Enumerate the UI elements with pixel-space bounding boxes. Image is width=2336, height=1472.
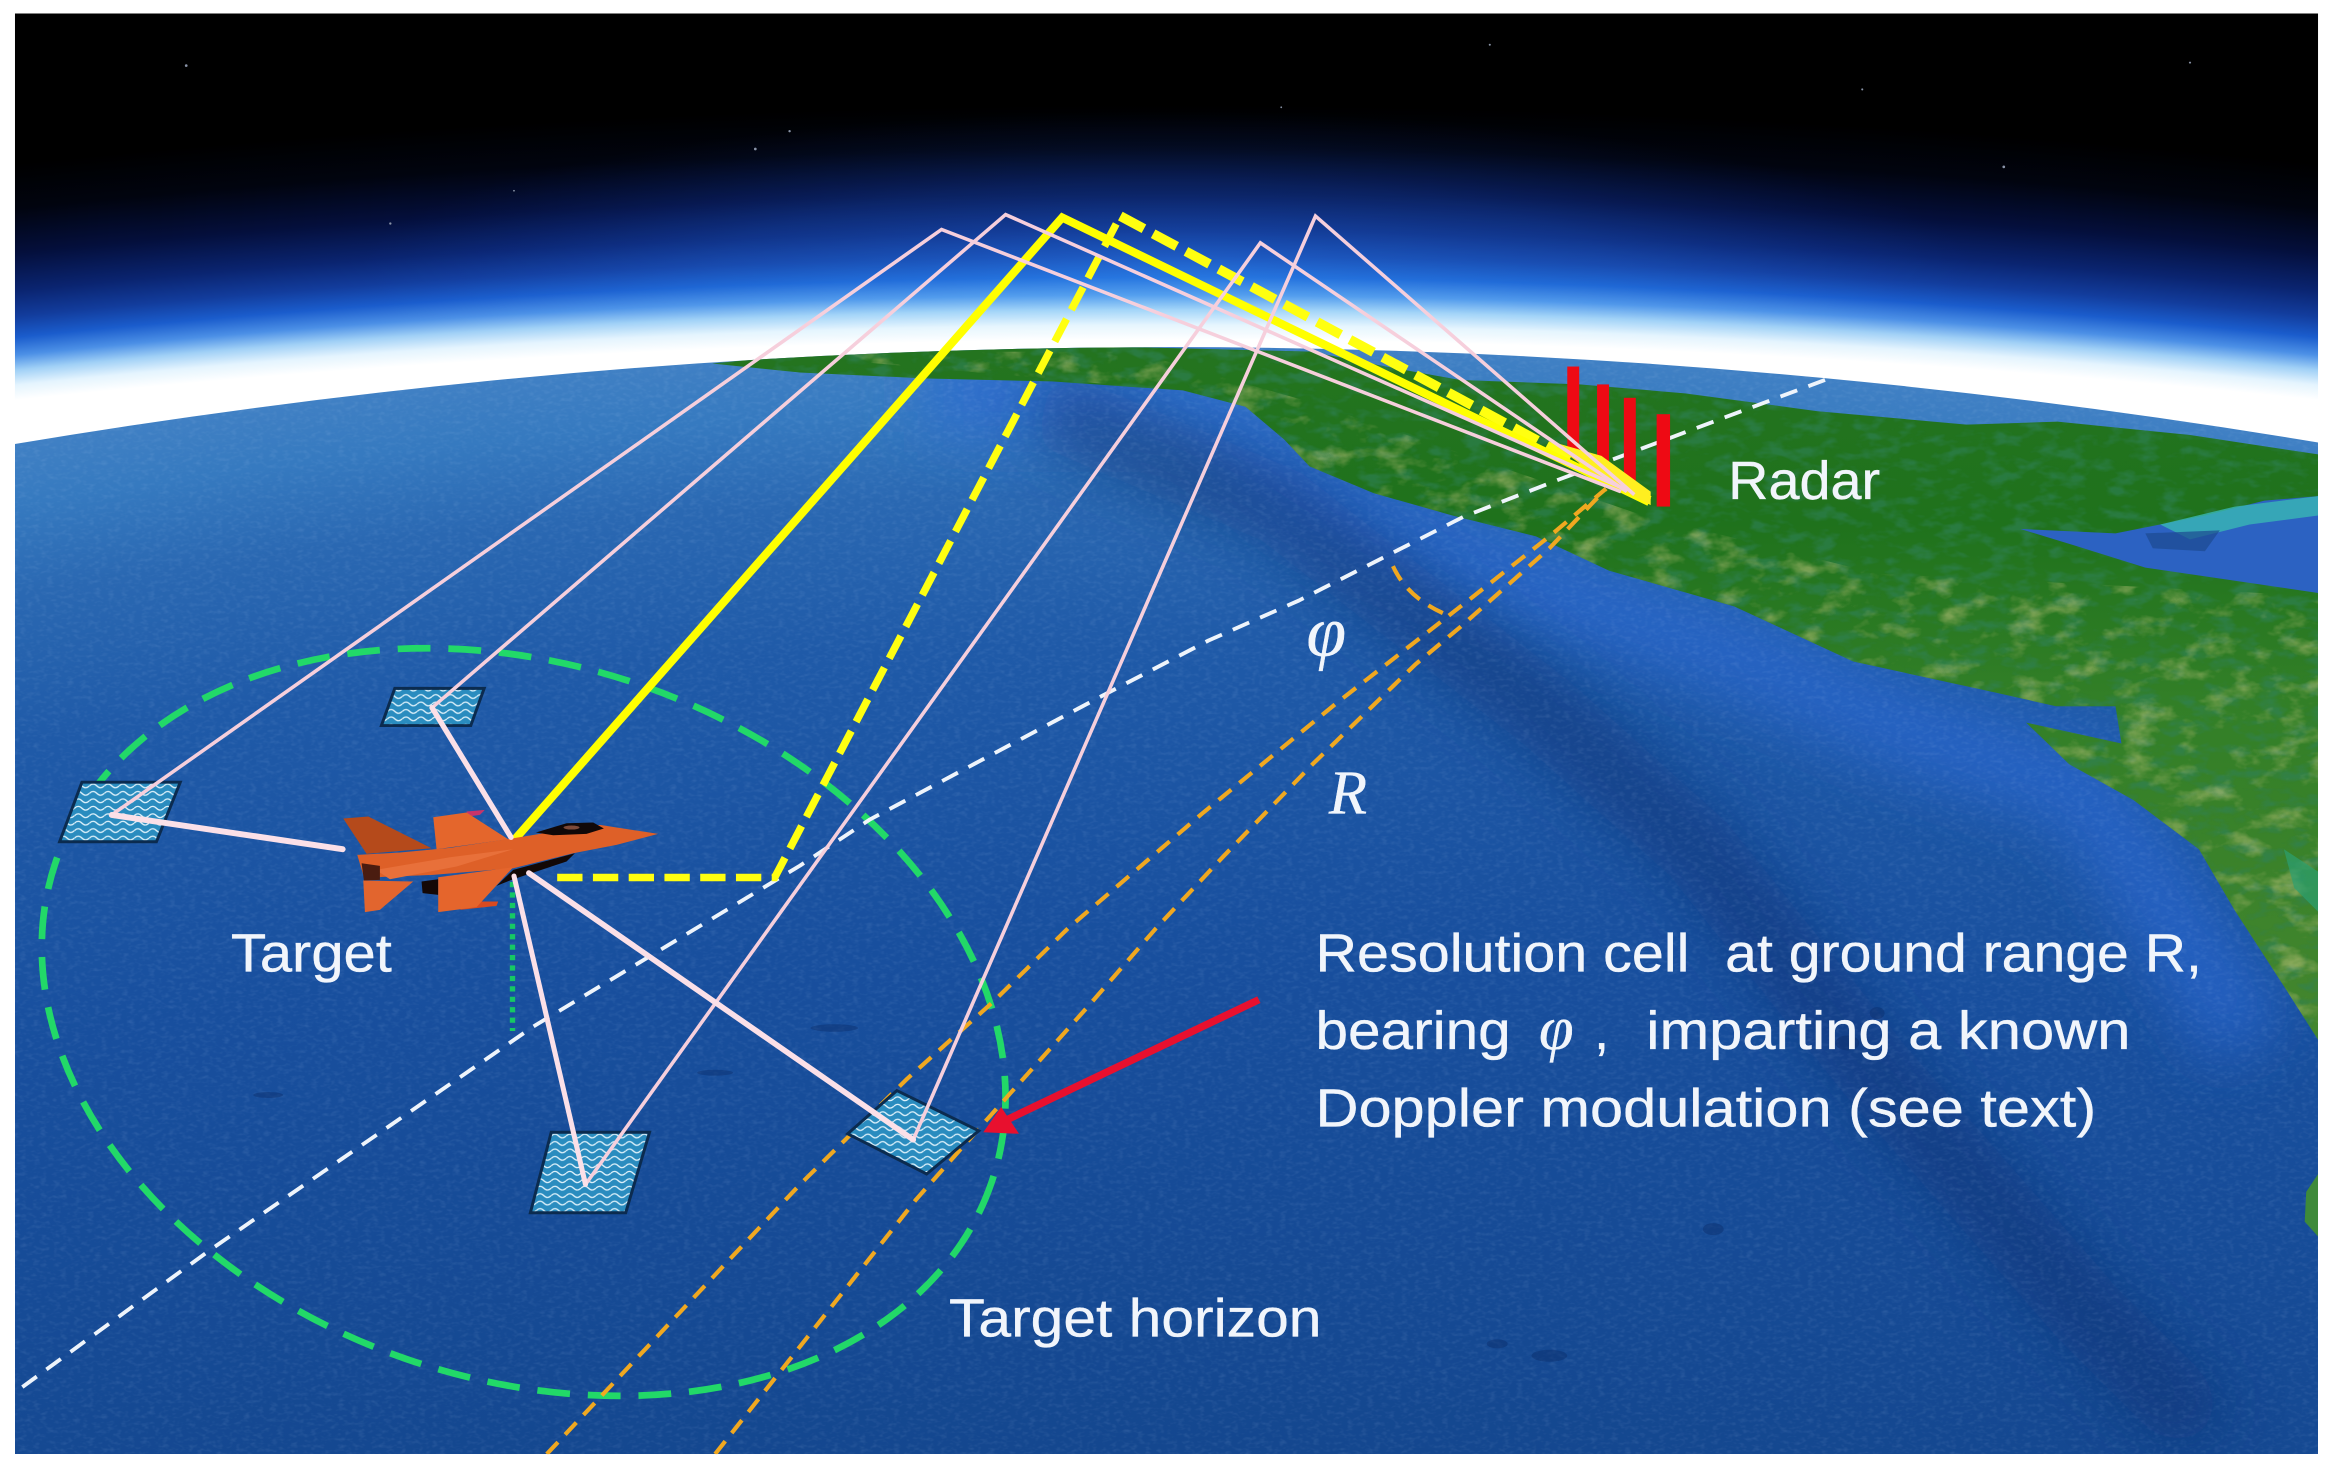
pink lines: clutter paths via ionosphere to radar bbox=[112, 215, 1634, 1184]
red arrow: points to resolution cell bbox=[983, 1000, 1259, 1134]
resolution cell: top bbox=[381, 688, 484, 726]
callout text: resolution cell description: imparting a known bbox=[1646, 1001, 2130, 1061]
resolution cell: far left bbox=[60, 782, 180, 842]
callout text: resolution cell description: Resolution cell bbox=[1315, 923, 1689, 983]
red bars: radar array bbox=[1567, 367, 1670, 507]
yellow solid line: direct path to target bbox=[514, 218, 1649, 840]
green dashed circle: target horizon bbox=[38, 644, 1009, 1400]
yellow dashed line: target echo path bbox=[557, 216, 1649, 878]
orange dashed lines: range-bearing cell edges bbox=[547, 489, 1606, 1454]
icon: orange fighter jet target bbox=[343, 810, 658, 912]
green dotted line: target altitude bbox=[511, 882, 514, 1031]
callout text: resolution cell description: Doppler modulation (see text) bbox=[1315, 1078, 2096, 1138]
label: Target: Target bbox=[231, 923, 392, 983]
resolution cell: right, at range R bbox=[848, 1091, 979, 1174]
callout text: resolution cell description bbox=[1315, 923, 2202, 1138]
background: starry sky with atmospheric glow bbox=[14, 14, 2318, 396]
label: Radar: Radar bbox=[1728, 451, 1880, 511]
beam convergence at radar bbox=[1549, 441, 1651, 505]
white dashed line: radar boresight bbox=[22, 380, 1825, 1387]
land: green coast region bbox=[700, 335, 2318, 1237]
callout text: resolution cell description: at ground range R, bbox=[1725, 923, 2202, 983]
label: Target horizon: Target horizon bbox=[949, 1288, 1321, 1348]
resolution cell: bottom bbox=[530, 1132, 650, 1213]
callout text: resolution cell description: bearing bbox=[1315, 1001, 1511, 1061]
pink thick lines: target scatter to cells bbox=[112, 708, 913, 1184]
callout text: resolution cell description: φ bbox=[1539, 993, 1574, 1063]
callout text: resolution cell description: , bbox=[1594, 1001, 1609, 1061]
symbol: R range: R bbox=[1328, 757, 1367, 827]
angle arc: bearing bbox=[1393, 566, 1448, 615]
symbol: phi bearing: φ bbox=[1307, 593, 1346, 672]
